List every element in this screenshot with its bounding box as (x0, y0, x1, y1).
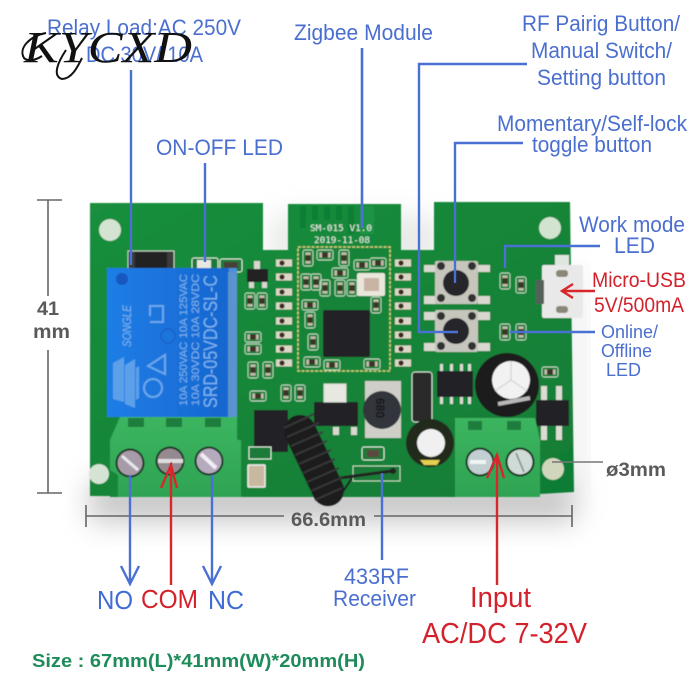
label: RF pairing button: RF Pairig Button/ (522, 11, 681, 36)
arrow: power input (487, 454, 504, 585)
label: momentary toggle button: toggle button (532, 132, 652, 157)
leader: 433RF receiver (381, 473, 383, 560)
arrow: micro USB (562, 284, 595, 298)
leader: online offline LED (510, 331, 595, 333)
screw COM (156, 446, 184, 476)
leader: momentary toggle button (455, 143, 523, 283)
label: power input: AC/DC 7-32V (422, 618, 588, 650)
label: work mode LED: LED (614, 233, 655, 258)
relay logo stripes (113, 357, 139, 408)
leader: RF pairing button (419, 64, 527, 332)
panel: circuit board (89, 202, 583, 500)
bridge IC right (536, 367, 569, 440)
leader: work mode LED (505, 246, 600, 268)
screw NC (194, 446, 224, 476)
small parts near antenna (340, 447, 400, 481)
label: zigbee module: Zigbee Module (294, 20, 433, 45)
label: RF pairing button: Manual Switch/ (531, 38, 673, 63)
relay printed text: SRD-05VDC-SL-C (201, 275, 222, 408)
leader: zigbee module (361, 48, 363, 228)
label: COM: COM (141, 584, 198, 614)
label: momentary toggle button (497, 111, 688, 157)
relay (107, 268, 237, 417)
dimension: 41 mm height (33, 200, 70, 493)
label: 433RF receiver: Receiver (333, 586, 416, 611)
tact button: momentary (424, 261, 490, 304)
label: micro USB: 5V/500mA (594, 294, 684, 317)
screw NO (116, 448, 144, 478)
screw left (466, 448, 494, 476)
label: 433RF receiver: 433RF (344, 564, 409, 589)
label: micro USB: Micro-USB (592, 269, 686, 292)
electrolytic capacitor large (475, 353, 539, 417)
relay printed text: 10A 250VAC 10A 125VAC (178, 274, 190, 406)
label: online offline LED: LED (606, 360, 641, 380)
label: RF pairing button (522, 11, 681, 90)
QFN chip (323, 310, 370, 357)
dimension: 66.6mm width: 66.6mm (291, 510, 366, 531)
dimension: 66.6mm width (86, 505, 572, 531)
tact button: pairing (424, 310, 490, 352)
leader: on-off LED (204, 163, 206, 262)
micro USB connector (536, 255, 583, 318)
label: relay load: DC 30V/ 10A (86, 42, 203, 67)
RF crystal (357, 273, 385, 296)
label: 433RF receiver (333, 564, 416, 611)
electrolytic capacitor small (406, 419, 454, 467)
board shadow (90, 215, 585, 522)
label: work mode LED: Work mode (579, 212, 685, 237)
relay printed text (120, 274, 222, 408)
terminal block: power input (455, 418, 540, 497)
label: RF pairing button: Setting button (537, 65, 666, 90)
dimension: 41 mm height: 41 (37, 299, 59, 320)
arrow: NC (203, 475, 221, 584)
status LEDs row (192, 258, 242, 272)
size note: Size : 67mm(L)*41mm(W)*20mm(H) (32, 651, 365, 671)
terminal block: relay outputs (110, 417, 241, 497)
label: micro USB (592, 269, 686, 317)
board silkscreen text: SM-015 V1.0 (310, 224, 372, 234)
board silkscreen text: 2019-11-08 (314, 236, 370, 246)
label: momentary toggle button: Momentary/Self-lock (497, 111, 688, 136)
leader: relay load (130, 70, 132, 265)
label: NC: NC (208, 585, 244, 615)
label: power input: Input (470, 582, 531, 614)
inductor (363, 381, 401, 438)
status LEDs right (500, 273, 526, 340)
relay printed text: 10A 30VDC 10A 28VDC (190, 274, 202, 406)
arrow: COM (161, 463, 177, 585)
mounting holes (89, 217, 564, 484)
small components left (245, 293, 305, 401)
module passives (301, 250, 386, 370)
zigbee module (298, 247, 390, 371)
arrow: NO (121, 475, 139, 584)
label: relay load: Relay Load:AC 250V (47, 15, 241, 40)
dimension: 41 mm height: mm (33, 322, 70, 343)
label: work mode LED (579, 212, 685, 258)
SOIC chip (412, 364, 473, 422)
screw right (506, 448, 534, 476)
relay certification marks (144, 306, 165, 397)
label: power input (422, 582, 588, 650)
label: online offline LED (601, 322, 658, 380)
board silkscreen text (310, 224, 372, 246)
dimension: hole 3mm (552, 460, 666, 481)
label: on-off LED: ON-OFF LED (156, 135, 283, 160)
logo watermark: KYCXD (23, 23, 192, 72)
relay printed text: SONGLE (120, 304, 134, 347)
dark ICs lower left (249, 384, 358, 459)
wire coil antenna (284, 414, 352, 500)
PCB outline (90, 202, 574, 497)
module pads (276, 260, 411, 366)
inductor: 680 (373, 398, 387, 418)
diode (128, 251, 174, 271)
crystal lower left (248, 465, 265, 487)
antenna traces (300, 206, 374, 234)
label: online offline LED: Online/ (601, 322, 658, 342)
dimension: hole 3mm: ø3mm (606, 460, 666, 481)
label: NO: NO (97, 585, 133, 615)
label: relay load (47, 15, 241, 67)
transistor (247, 261, 268, 288)
label: online offline LED: Offline (601, 341, 652, 361)
